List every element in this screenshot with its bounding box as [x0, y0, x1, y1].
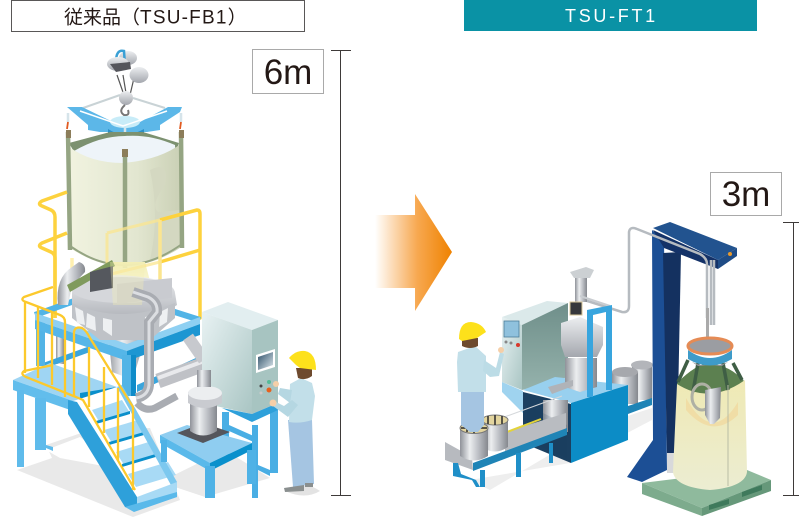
upper yellow rail — [40, 192, 200, 318]
feeder unit — [548, 267, 612, 397]
upper platform — [35, 290, 200, 396]
conveyor floor shadow — [470, 408, 652, 490]
gantry column — [627, 222, 737, 482]
bag with liner — [673, 360, 747, 490]
header: new model — [464, 0, 757, 31]
machine: new TSU-FT1 — [445, 222, 771, 516]
blue base — [523, 377, 628, 463]
height label: 3m: 3m — [722, 175, 770, 214]
hopper body — [58, 260, 177, 340]
header: conventional model: 従来品（TSU-FB1） — [64, 6, 247, 28]
worker — [270, 351, 320, 496]
hoist — [107, 51, 148, 115]
height label: 6m: 6m — [264, 53, 312, 92]
height scale: 3m — [783, 222, 799, 496]
header: conventional model — [12, 0, 304, 32]
height label: 3m — [710, 172, 782, 216]
conveyor — [445, 396, 567, 487]
control cabinet — [202, 302, 278, 498]
front cans — [460, 415, 508, 460]
lower yellow rail — [22, 287, 135, 490]
discharge ring — [688, 308, 732, 366]
rear cans — [612, 360, 653, 404]
translucent rail over bag — [107, 220, 160, 280]
machine: conventional TSU-FB1 — [13, 51, 320, 517]
control box — [502, 301, 568, 413]
ducts — [133, 292, 223, 409]
arrow: orange gradient — [375, 194, 452, 311]
height label: 6m — [252, 50, 324, 94]
spreader frame — [67, 95, 182, 148]
lower deck and stairs — [13, 363, 177, 512]
header: new model: TSU-FT1 — [565, 6, 658, 26]
floor shadow — [17, 428, 270, 517]
rear conveyor — [628, 398, 652, 414]
height scale: 6m — [331, 50, 351, 496]
bulk bag — [66, 130, 184, 300]
pallet — [642, 470, 771, 516]
pipe — [578, 228, 714, 325]
worker — [457, 322, 504, 432]
small stand with pot — [160, 370, 256, 498]
